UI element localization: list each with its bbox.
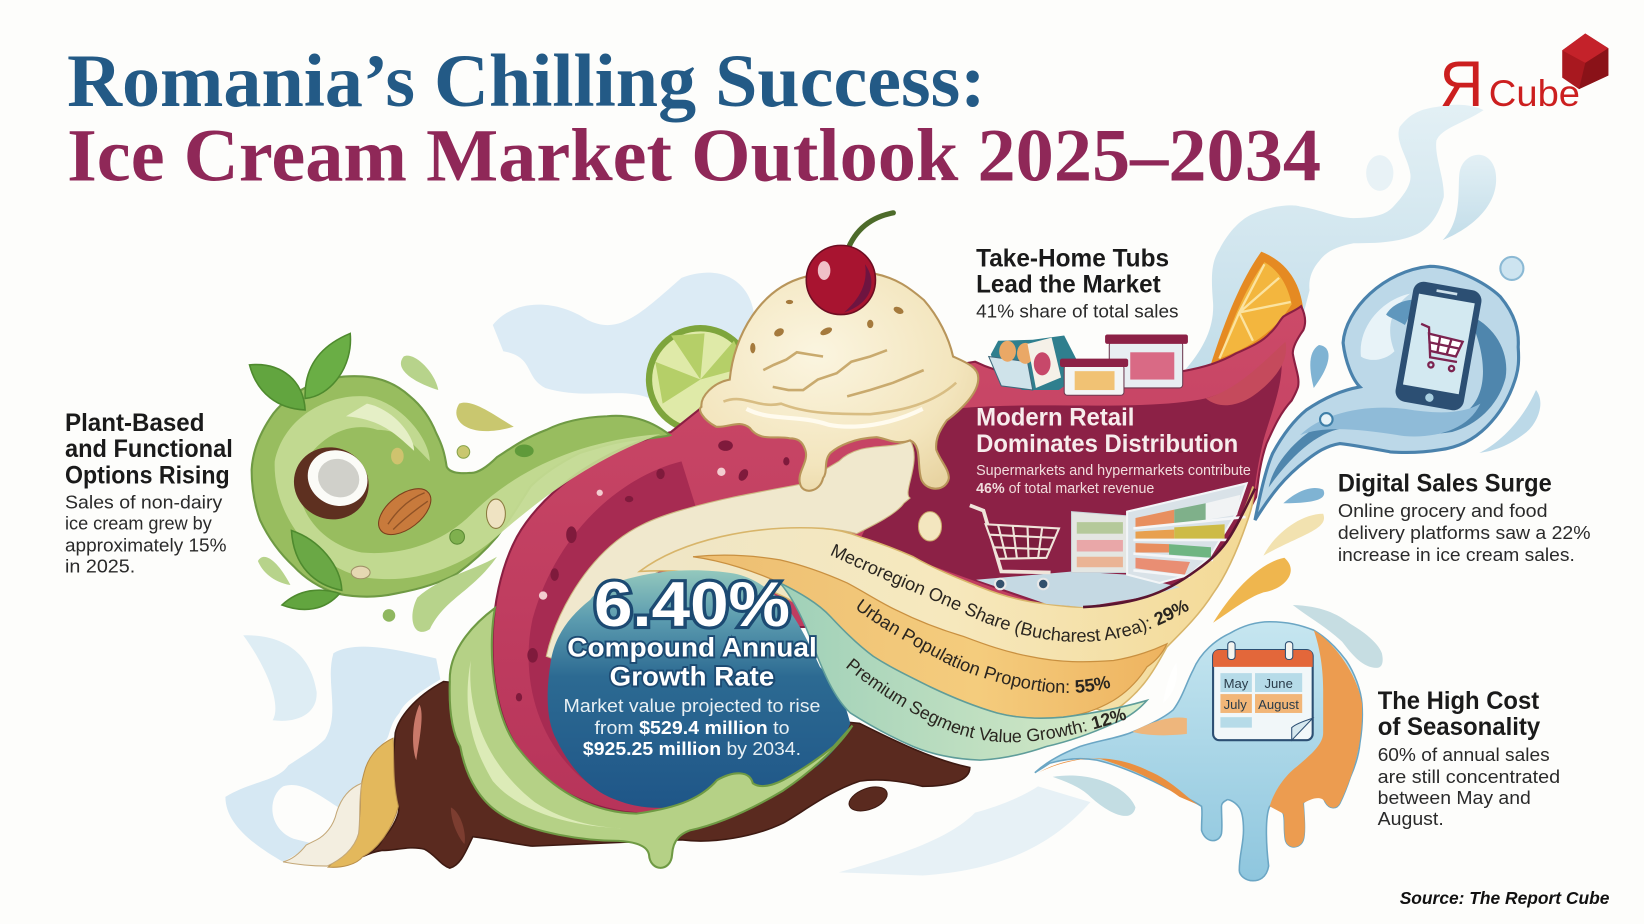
modern retail text [976,405,1251,497]
pale blue background swirls [225,105,1540,875]
seasonality text [1378,688,1560,829]
seeds [351,445,534,579]
calendar: May [1224,676,1249,691]
calendar: June [1264,676,1293,691]
digital sales text: delivery platforms saw a 22% [1338,522,1591,543]
lime slice [646,325,755,434]
cone swirl cream [283,783,362,866]
seasonality melt with calendar [1035,622,1362,881]
modern retail text: 46% of total market revenue [976,481,1154,497]
blue droplets [1283,257,1523,503]
ribbon labels: Premium Segment Value Growth: 12% [846,658,1126,742]
digital sales text: increase in ice cream sales. [1338,544,1575,565]
modern retail text: Modern Retail [976,405,1134,432]
modern retail text: Supermarkets and hypermarkets contribute [976,463,1251,479]
growth rate text: Compound Annual [567,631,817,662]
seasonality text: The High Cost [1378,688,1539,715]
plant-based text: ice cream grew by [65,512,213,533]
seasonality text: 60% of annual sales [1378,744,1550,765]
cream droplet [918,512,942,541]
take-home tubs illustration [989,334,1188,395]
digital sales text: Online grocery and food [1338,500,1548,521]
chocolate droplet [846,782,890,816]
cream and orange droplets [1213,514,1324,623]
seasonality text: between May and [1378,787,1531,808]
growth rate text: $925.25 million by 2034. [583,738,801,759]
logo [1440,34,1608,120]
growth rate pool [548,570,850,808]
digital wave with phone [1255,266,1519,520]
plant-based text: Sales of non-dairy [65,492,223,513]
seasonality text: of Seasonality [1378,714,1540,741]
plant-based text [65,410,233,576]
title: Ice Cream Market Outlook 2025–2034 [67,114,1321,197]
berry ribbon [493,306,1305,814]
growth rate text: Growth Rate [610,661,774,692]
shopping cart illustration [970,505,1059,589]
cream swirl [546,440,914,671]
take-home tubs text: 41% share of total sales [976,301,1178,322]
calendar: August [1258,697,1299,712]
green droplets [258,356,514,632]
title: Romania’s Chilling Success: [67,40,986,123]
ribbon labels: Mecroregion One Share (Bucharest Area): 29% [830,544,1189,642]
growth rate text [564,570,820,759]
supermarket shelves illustration [1072,483,1247,583]
phone [1394,280,1483,412]
plant-based text: Options Rising [65,462,230,489]
take-home tubs text [976,245,1178,322]
coconut [282,435,381,532]
title [67,40,1321,197]
calendar [1213,642,1313,740]
growth rate text: Market value projected to rise [564,695,820,716]
plant-based text: Plant-Based [65,410,204,437]
green ribbon [780,583,1147,760]
growth rate text: 6.40% [594,570,790,640]
ice cream scoop [700,271,978,491]
source note: Source: The Report Cube [1400,888,1609,908]
orange ribbon [693,555,1167,718]
ribbon labels: Urban Population Proportion: 55% [857,598,1110,693]
phone cart icon [1414,324,1464,372]
berry edge line [1083,489,1255,607]
cream ribbon [640,486,1253,713]
seasonality text: August. [1378,808,1444,829]
leaves [250,333,350,609]
plant-based text: and Functional [65,436,233,463]
green crescent with drip [450,608,852,868]
plant-based swirl [250,333,670,609]
cherry [806,213,893,315]
logo: Я [1440,47,1484,120]
seasonality text: are still concentrated [1378,766,1560,787]
chocolate base [283,682,970,868]
cone swirl gold [328,738,398,867]
plant-based text: approximately 15% [65,535,226,556]
almond [370,480,439,544]
store floor [976,571,1180,607]
digital sales text: Digital Sales Surge [1338,471,1552,498]
orange slice [1210,252,1303,367]
green swirl body [252,376,670,597]
take-home tubs text: Lead the Market [976,272,1161,299]
logo: Cube [1489,73,1580,114]
modern retail text: Dominates Distribution [976,431,1238,458]
ribbon labels [830,544,1189,742]
plant-based text: in 2025. [65,555,135,576]
growth rate text: from $529.4 million to [594,717,789,738]
calendar: July [1224,697,1247,712]
digital sales text [1338,471,1591,565]
take-home tubs text: Take-Home Tubs [976,245,1169,272]
